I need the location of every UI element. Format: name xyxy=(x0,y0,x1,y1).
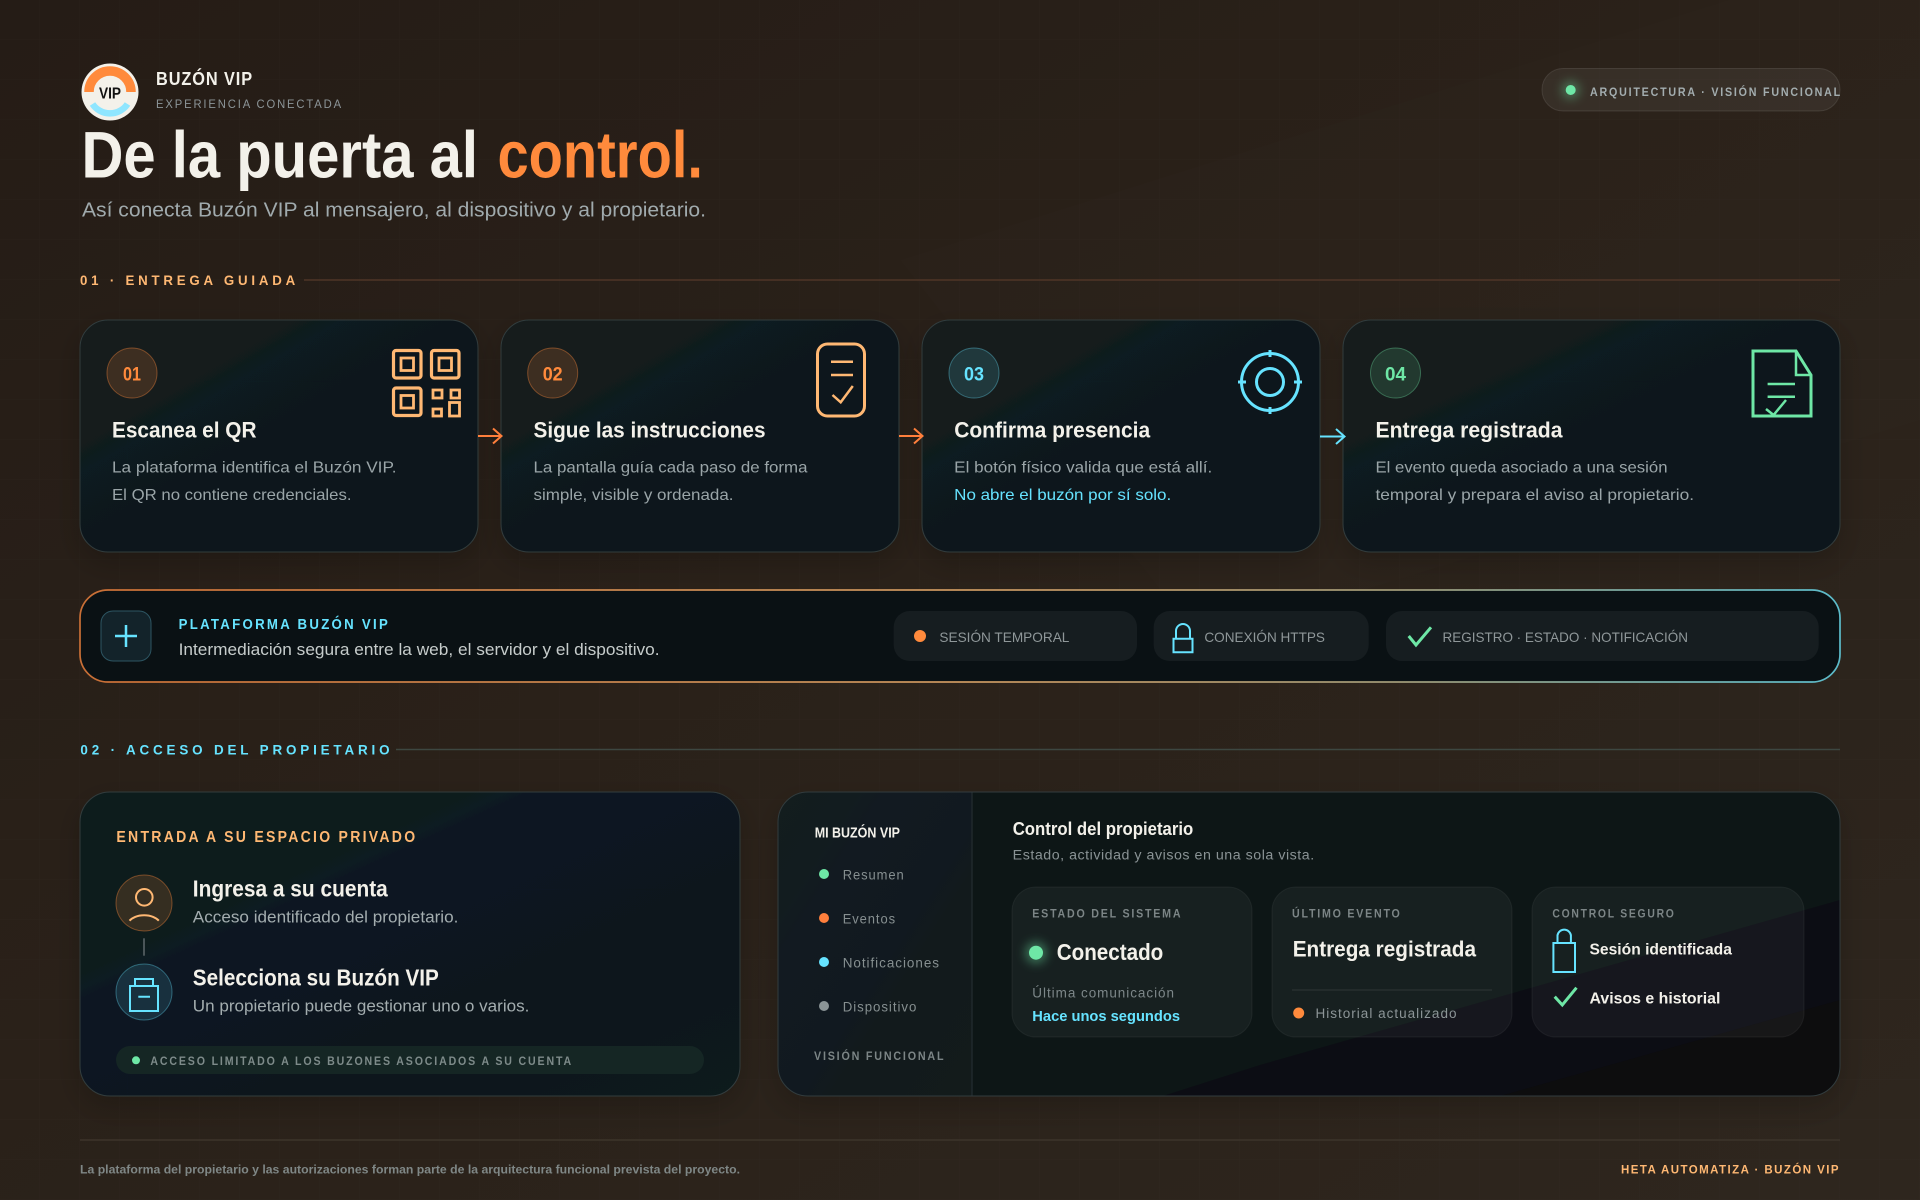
status card: último evento xyxy=(1272,887,1512,1037)
step description: El QR no contiene credenciales. xyxy=(112,487,352,504)
step description xyxy=(1376,460,1694,504)
step description xyxy=(534,460,808,504)
step number 03: 03 xyxy=(964,364,984,386)
arrow: step 2 to 3 xyxy=(899,428,922,444)
status card: control seguro: Avisos e historial xyxy=(1590,990,1720,1007)
sidebar footer label: VISIÓN FUNCIONAL xyxy=(814,1048,945,1063)
icon: Buzón VIP logo xyxy=(82,64,138,120)
icon: target xyxy=(1238,350,1302,414)
panel: entrada al espacio privado xyxy=(80,792,740,1096)
status pill: arquitectura xyxy=(1542,68,1842,111)
status card: último evento: Entrega registrada xyxy=(1293,937,1476,962)
step number 04 xyxy=(1370,348,1420,398)
dashboard subheading: Estado, actividad y avisos en una sola vista. xyxy=(1013,847,1315,862)
step description: El evento queda asociado a una sesión xyxy=(1376,460,1668,477)
arrow: step 1 to 2 xyxy=(478,428,502,444)
status card: estado del sistema: Hace unos segundos xyxy=(1032,1008,1180,1025)
icon: person xyxy=(116,875,172,931)
nav item: resumen: Resumen xyxy=(843,866,905,882)
status card: último evento: Historial actualizado xyxy=(1316,1006,1458,1021)
chip: registro estado notificación: REGISTRO · ESTADO · NOTIFICACIÓN xyxy=(1442,629,1688,645)
step title: Escanea el QR xyxy=(112,418,257,443)
access note pill xyxy=(116,1046,704,1074)
nav item: eventos xyxy=(819,910,896,926)
step description xyxy=(954,460,1212,504)
select mailbox step text: Selecciona su Buzón VIP xyxy=(193,965,439,991)
icon: lock xyxy=(1553,930,1575,972)
footer xyxy=(80,1140,1840,1176)
step description: simple, visible y ordenada. xyxy=(534,487,734,504)
panel: step 01 xyxy=(80,320,478,552)
connector line xyxy=(143,938,145,956)
step number 02 xyxy=(528,348,578,398)
step description xyxy=(112,460,396,504)
step number 01: 01 xyxy=(123,364,141,386)
brand name: BUZÓN VIP xyxy=(156,68,253,89)
icon: checklist clipboard xyxy=(818,344,864,416)
select mailbox step text xyxy=(193,965,529,1016)
platform description: Intermediación segura entre la web, el servidor y el dispositivo. xyxy=(179,640,660,659)
step description: temporal y prepara el aviso al propietario. xyxy=(1376,487,1694,504)
select mailbox step text: Un propietario puede gestionar uno o varios. xyxy=(193,998,529,1016)
sidebar title: MI BUZÓN VIP xyxy=(815,823,900,841)
section heading 01: 01 · ENTREGA GUIADA xyxy=(80,272,299,288)
step description: No abre el buzón por sí solo. xyxy=(954,487,1171,504)
platform heading: PLATAFORMA BUZÓN VIP xyxy=(179,615,390,633)
step number 02: 02 xyxy=(543,364,563,386)
title: De la puerta al xyxy=(82,117,478,191)
panel: step 03 xyxy=(922,320,1320,552)
nav item: notificaciones: Notificaciones xyxy=(843,954,940,970)
dashboard heading: Control del propietario xyxy=(1013,819,1193,839)
step title: Confirma presencia xyxy=(954,418,1151,443)
header brand xyxy=(82,64,343,120)
step title: Entrega registrada xyxy=(1376,418,1563,443)
footer credit: HETA AUTOMATIZA · BUZÓN VIP xyxy=(1621,1161,1840,1176)
step number 01 xyxy=(107,348,157,398)
step description: La pantalla guía cada paso de forma xyxy=(534,460,808,477)
icon: document with check xyxy=(1753,351,1811,416)
status card: control seguro: Sesión identificada xyxy=(1590,941,1732,958)
login step text: Ingresa a su cuenta xyxy=(193,876,388,902)
nav item: eventos: Eventos xyxy=(843,910,896,926)
nav item: resumen xyxy=(819,866,905,882)
status card: último evento: ÚLTIMO EVENTO xyxy=(1292,905,1402,920)
step description: El botón físico valida que está allí. xyxy=(954,460,1212,477)
section heading 02: 02 · ACCESO DEL PROPIETARIO xyxy=(80,741,393,757)
panel heading: ENTRADA A SU ESPACIO PRIVADO xyxy=(116,829,417,846)
chip: sesión temporal xyxy=(894,611,1137,661)
chip: sesión temporal: SESIÓN TEMPORAL xyxy=(939,629,1070,645)
access note pill: ACCESO LIMITADO A LOS BUZONES ASOCIADOS A SU CUENTA xyxy=(150,1056,573,1068)
panel: plataforma bar xyxy=(80,590,1840,682)
status card: control seguro: CONTROL SEGURO xyxy=(1552,906,1676,920)
icon: Buzón VIP logo: VIP xyxy=(99,85,121,102)
icon: mailbox xyxy=(116,964,172,1020)
status pill: arquitectura: ARQUITECTURA · VISIÓN FUNCIONAL xyxy=(1590,84,1842,99)
step number 03 xyxy=(949,348,999,398)
icon: QR code xyxy=(394,350,460,416)
icon: plus xyxy=(101,611,151,661)
chip: conexión https xyxy=(1154,611,1369,661)
step title: Sigue las instrucciones xyxy=(534,418,766,443)
chip: registro estado notificación xyxy=(1386,611,1819,661)
panel: step 04 xyxy=(1343,320,1840,552)
step number 04: 04 xyxy=(1385,364,1406,386)
panel: step 02 xyxy=(501,320,899,552)
step description: La plataforma identifica el Buzón VIP. xyxy=(112,460,396,477)
status card: estado del sistema: Última comunicación xyxy=(1032,984,1175,1000)
status card: estado del sistema: Conectado xyxy=(1057,939,1163,965)
subtitle: Así conecta Buzón VIP al mensajero, al dispositivo y al propietario. xyxy=(82,200,706,222)
status card: estado del sistema: ESTADO DEL SISTEMA xyxy=(1032,906,1182,920)
status card: control seguro xyxy=(1532,887,1804,1037)
brand tagline: EXPERIENCIA CONECTADA xyxy=(156,97,343,111)
icon: check xyxy=(1555,988,1576,1005)
arrow: step 3 to 4 xyxy=(1320,429,1344,444)
status card: estado del sistema xyxy=(1012,887,1252,1037)
nav item: dispositivo: Dispositivo xyxy=(843,998,917,1014)
login step text: Acceso identificado del propietario. xyxy=(193,909,458,927)
footer note: La plataforma del propietario y las autorizaciones forman parte de la arquitectura funcional prevista del proyecto. xyxy=(80,1162,740,1176)
login step text xyxy=(193,876,458,927)
sidebar xyxy=(778,792,972,1096)
chip: conexión https: CONEXIÓN HTTPS xyxy=(1204,629,1325,645)
title: control. xyxy=(498,117,703,191)
panel: control del propietario dashboard xyxy=(778,792,1840,1096)
